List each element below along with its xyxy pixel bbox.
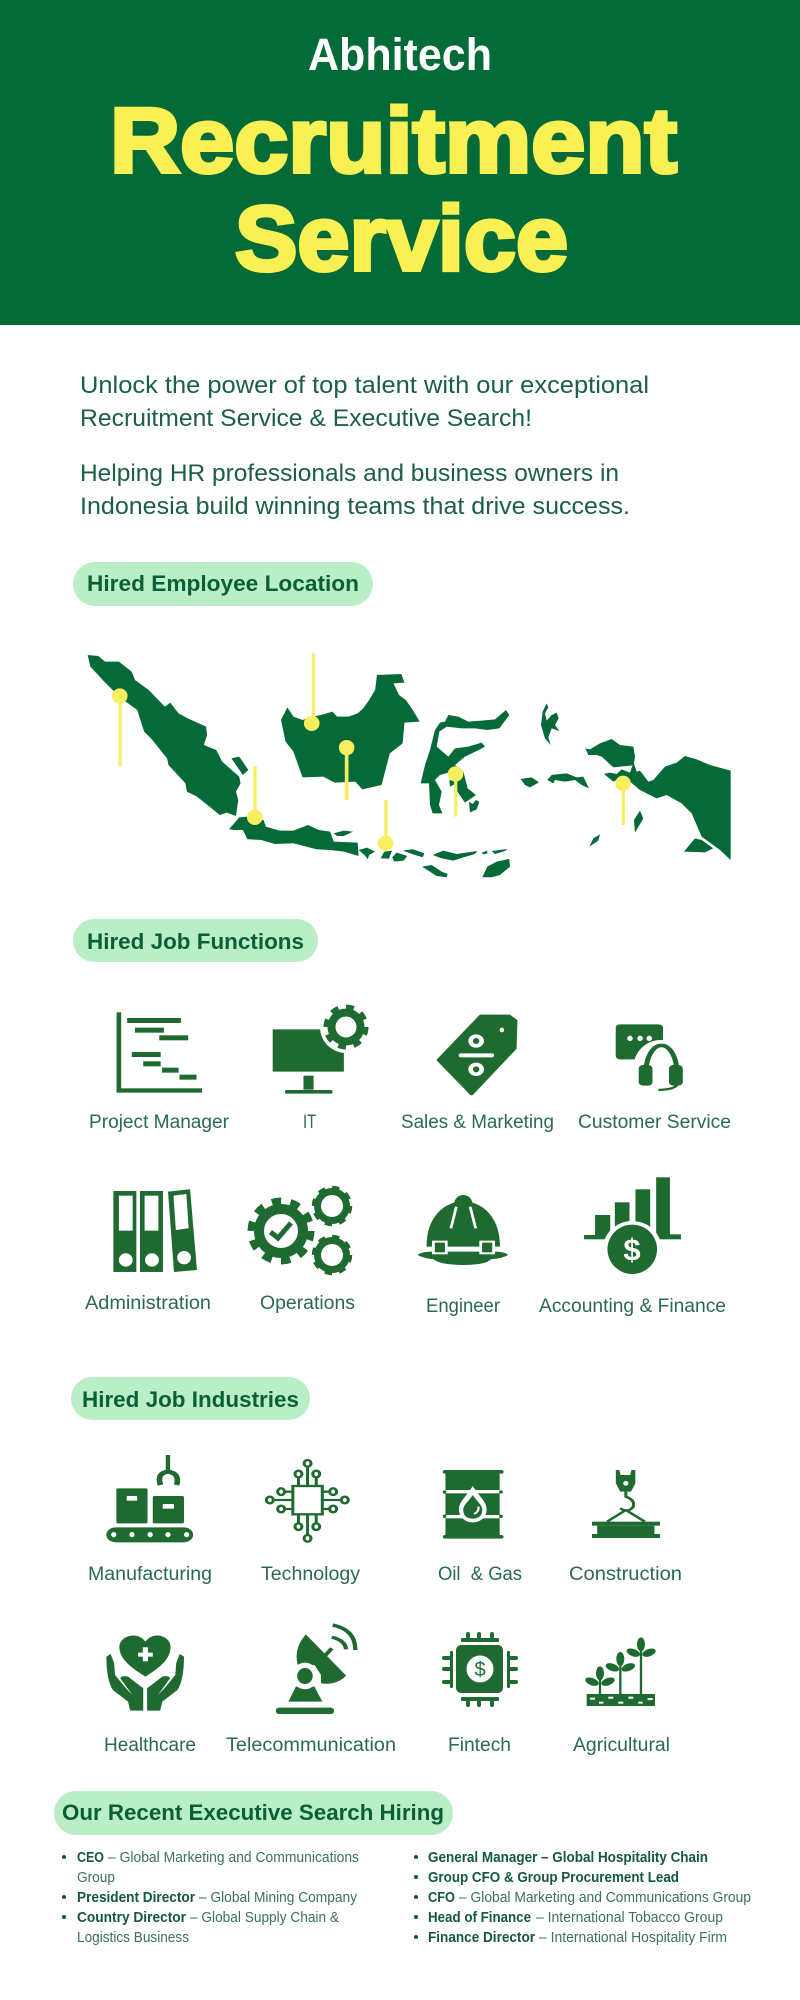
label: Operations: Operations bbox=[260, 1293, 355, 1314]
list: executive hires right column: Head of Finance bbox=[428, 1910, 531, 1926]
list: executive hires left column: Country Director bbox=[77, 1910, 186, 1926]
intro text: Indonesia build winning teams that drive success. bbox=[80, 493, 630, 520]
label: Telecommunication: Telecommunication bbox=[226, 1735, 396, 1756]
list: executive hires right column: CFO bbox=[428, 1890, 455, 1906]
brand name: Abhitech bbox=[308, 29, 492, 80]
heading: Our Recent Executive Search Hiring bbox=[54, 1791, 453, 1835]
list: executive hires left column: President Director bbox=[77, 1890, 195, 1906]
icon: technology circuit chip bbox=[266, 1460, 348, 1542]
list: executive hires right column bbox=[414, 1850, 751, 1946]
icon: oil barrel bbox=[443, 1470, 504, 1539]
icon: construction crane hook bbox=[592, 1470, 660, 1538]
intro text: Unlock the power of top talent with our exceptional bbox=[80, 372, 649, 399]
label: Customer Service: Customer Service bbox=[578, 1112, 731, 1133]
icon: fintech chip with dollar bbox=[442, 1632, 518, 1707]
heading: Hired Employee Location bbox=[73, 562, 373, 606]
label: Sales & Marketing: Sales & Marketing bbox=[401, 1112, 554, 1133]
header banner bbox=[0, 0, 800, 325]
list: executive hires left column: – Global Mining Company bbox=[199, 1890, 358, 1906]
list: executive hires left column bbox=[62, 1850, 359, 1946]
heading: Hired Job Functions: Hired Job Functions bbox=[87, 929, 304, 954]
heading: Hired Employee Location: Hired Employee Location bbox=[87, 571, 359, 596]
icon: engineer hard hat bbox=[417, 1195, 508, 1265]
heading: Hired Job Industries: Hired Job Industries bbox=[82, 1387, 299, 1412]
list: executive hires left column: Logistics Business bbox=[77, 1930, 189, 1946]
label: Administration: Administration bbox=[85, 1293, 211, 1314]
label: IT: IT bbox=[303, 1112, 316, 1133]
label: Oil & Gas: Oil & Gas bbox=[438, 1564, 522, 1585]
label: Engineer: Engineer bbox=[426, 1296, 501, 1317]
label: Project Manager: Project Manager bbox=[89, 1112, 230, 1133]
label: Technology: Technology bbox=[261, 1564, 361, 1585]
label: Manufacturing: Manufacturing bbox=[88, 1564, 212, 1585]
icon: customer service headset bbox=[616, 1024, 688, 1097]
list: executive hires right column: Finance Director bbox=[428, 1930, 535, 1946]
icon: healthcare heart in hands bbox=[106, 1635, 184, 1711]
title line 2: Service bbox=[235, 188, 568, 290]
list: executive hires left column: – Global Marketing and Communications bbox=[108, 1850, 359, 1866]
heading: Hired Job Functions bbox=[73, 919, 318, 962]
list: executive hires right column: General Manager – Global Hospitality Chain bbox=[428, 1850, 708, 1866]
icon: accounting chart with dollar coin bbox=[584, 1177, 681, 1278]
label: Fintech: Fintech bbox=[448, 1735, 511, 1756]
heading: Our Recent Executive Search Hiring: Our Recent Executive Search Hiring bbox=[62, 1800, 444, 1825]
label: Accounting & Finance: Accounting & Finance bbox=[539, 1296, 726, 1317]
map of Indonesia with location pins bbox=[88, 653, 731, 877]
list: executive hires left column: – Global Supply Chain & bbox=[190, 1910, 339, 1926]
list: executive hires right column: Group CFO & Group Procurement Lead bbox=[428, 1870, 679, 1886]
list: executive hires left column: Group bbox=[77, 1870, 115, 1886]
icon: project manager gantt chart bbox=[117, 1012, 202, 1093]
icon: manufacturing conveyor bbox=[106, 1455, 193, 1542]
icon: administration binders bbox=[113, 1189, 197, 1272]
icon: fintech chip with dollar: $ bbox=[474, 1659, 486, 1681]
icon: agricultural plants bbox=[584, 1637, 657, 1706]
list: executive hires right column: – Global Marketing and Communications Group bbox=[459, 1890, 751, 1906]
icon: IT monitor with gear bbox=[273, 1001, 372, 1094]
label: Agricultural: Agricultural bbox=[573, 1735, 670, 1756]
label: Healthcare: Healthcare bbox=[104, 1735, 196, 1756]
intro text bbox=[80, 372, 649, 520]
list: executive hires right column: – International Tobacco Group bbox=[536, 1910, 723, 1926]
icon: operations gears bbox=[251, 1188, 350, 1273]
heading: Hired Job Industries bbox=[71, 1377, 310, 1420]
label: Construction: Construction bbox=[569, 1564, 682, 1585]
title line 1: Recruitment bbox=[110, 90, 677, 192]
icon: sales price tag bbox=[438, 1016, 516, 1094]
list: executive hires right column: – International Hospitality Firm bbox=[539, 1930, 727, 1946]
icon: accounting chart with dollar coin: $ bbox=[623, 1232, 641, 1267]
list: executive hires left column: CEO bbox=[77, 1850, 104, 1866]
intro text: Helping HR professionals and business owners in bbox=[80, 460, 619, 487]
intro text: Recruitment Service & Executive Search! bbox=[80, 405, 532, 432]
icon: telecommunication satellite dish bbox=[276, 1625, 355, 1714]
